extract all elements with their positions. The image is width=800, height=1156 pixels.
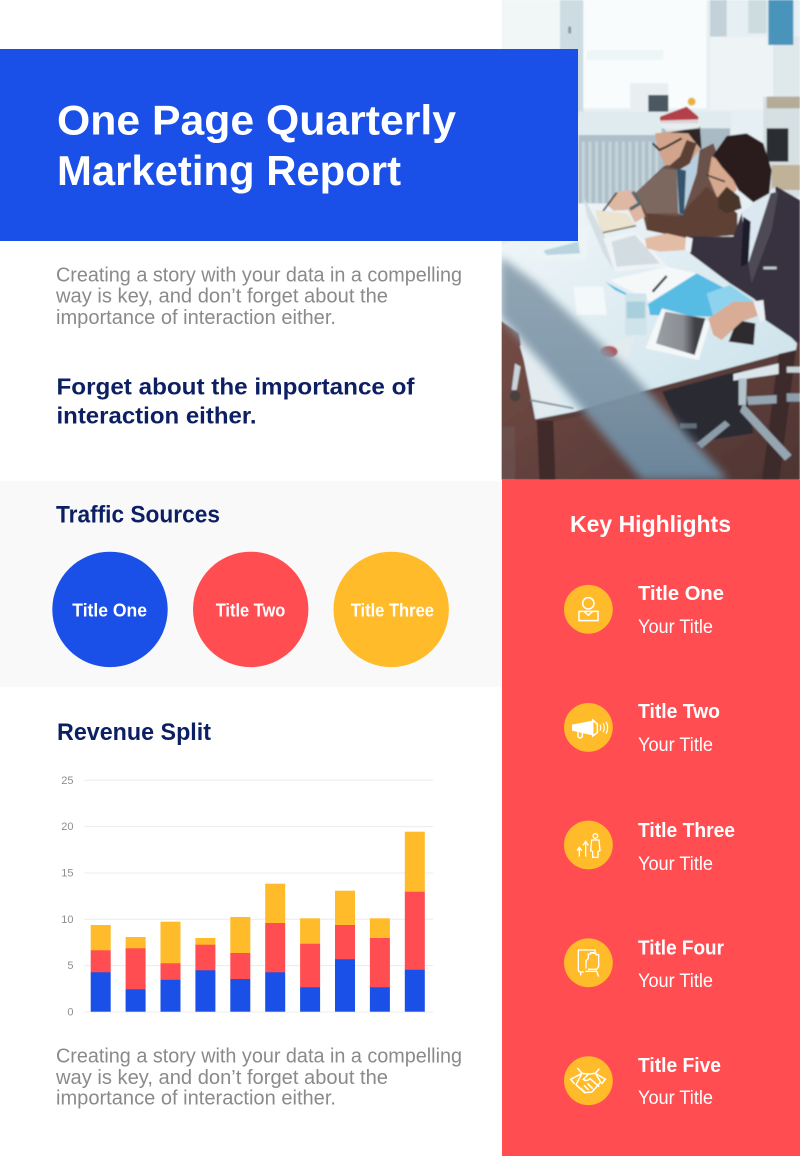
title: Marketing Report (57, 147, 401, 194)
intro paragraph: importance of interaction either. (56, 307, 336, 329)
circle: title two: Title Two (216, 600, 285, 620)
y axis labels (61, 775, 74, 1018)
closing paragraph (55, 1045, 462, 1110)
circle: title one: Title One (72, 600, 147, 620)
tablet (645, 308, 710, 360)
highlight item: title two (564, 701, 720, 756)
icon: hand on book (578, 950, 599, 977)
closing paragraph: importance of interaction either. (56, 1088, 336, 1110)
icon: person with growth arrows (577, 834, 600, 857)
y axis labels: 25 (61, 775, 74, 787)
panel: key highlights (502, 480, 800, 1156)
highlight item: title four (564, 938, 724, 992)
notebook + laptop (595, 210, 636, 233)
closing paragraph: way is key, and don’t forget about the (55, 1067, 388, 1089)
subheading (56, 373, 415, 428)
heading: traffic sources: Traffic Sources (56, 502, 220, 529)
paper with pie (577, 337, 635, 375)
intro paragraph (55, 264, 462, 329)
highlight item: title two: Title Two (638, 701, 720, 723)
papers (533, 227, 588, 260)
yellow segments (91, 832, 425, 964)
title banner (0, 49, 578, 241)
title (57, 96, 457, 194)
highlight item: title one: Title One (638, 583, 724, 605)
closing paragraph: Creating a story with your data in a compelling (56, 1045, 462, 1067)
heading: revenue split: Revenue Split (57, 719, 211, 746)
blue segments (91, 959, 425, 1012)
highlight item: title five: Title Five (638, 1055, 721, 1077)
circle: title one (52, 552, 168, 667)
heading: key highlights: Key Highlights (570, 511, 731, 537)
highlight item: title three (564, 820, 735, 875)
subheading: interaction either. (56, 402, 256, 428)
blue folder (605, 273, 753, 317)
phone and hand (729, 320, 755, 345)
y axis labels: 15 (61, 868, 74, 880)
circle: title three (334, 552, 449, 667)
circle: title two (193, 552, 308, 667)
intro paragraph: Creating a story with your data in a compelling (56, 264, 462, 286)
highlight item: title three: Title Three (638, 820, 735, 842)
highlight item: title one: Your Title (638, 617, 713, 638)
icon: person with envelope (579, 598, 598, 621)
stacked bar chart (61, 775, 433, 1018)
icon: handshake (571, 1068, 605, 1093)
highlight item: title four: Title Four (638, 938, 724, 960)
photo: two businessmen at an office table (500, 0, 800, 480)
glass (625, 293, 647, 335)
man one: santa hat in background (660, 107, 698, 123)
man two: dark suit (690, 187, 800, 343)
table (500, 203, 797, 419)
highlight item: title two: Your Title (638, 735, 713, 756)
floor (500, 283, 800, 480)
red segments (91, 892, 425, 990)
circle: title three: Title Three (351, 600, 434, 620)
highlight item: title three: Your Title (638, 854, 713, 875)
panel: traffic sources (0, 481, 501, 687)
y axis labels: 20 (61, 821, 74, 833)
y axis labels: 5 (67, 960, 74, 972)
y axis labels: 10 (61, 914, 74, 926)
table legs (537, 421, 555, 480)
icon: megaphone (572, 720, 608, 738)
foreground blurred bar (500, 257, 729, 480)
highlight item: title four: Your Title (638, 971, 713, 992)
man one: brown suit (635, 143, 737, 238)
highlight item: title five (564, 1055, 721, 1109)
intro paragraph: way is key, and don’t forget about the (55, 286, 388, 308)
y axis labels: 0 (67, 1006, 74, 1018)
subheading: Forget about the importance of (56, 373, 415, 399)
highlight item: title five: Your Title (638, 1088, 713, 1109)
title: One Page Quarterly (57, 96, 457, 144)
highlight item: title one (564, 583, 724, 638)
